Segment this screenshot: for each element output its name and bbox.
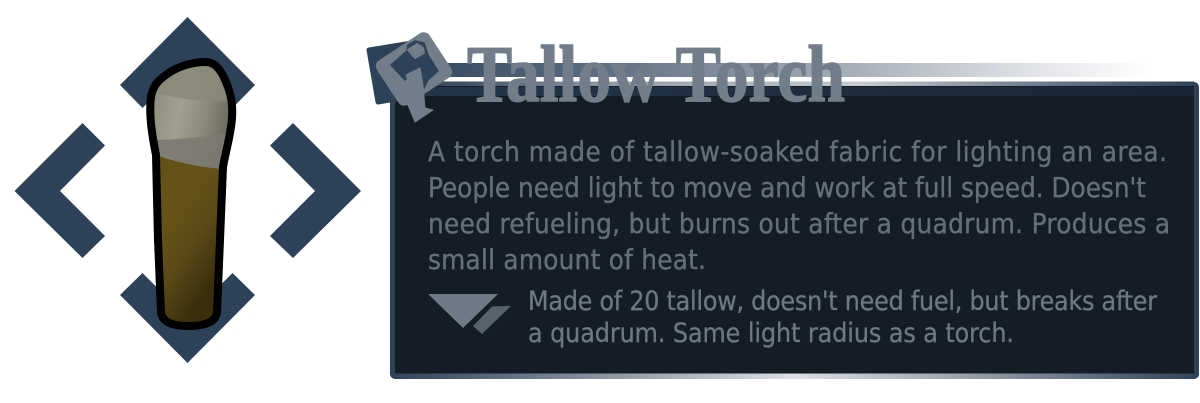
panel: description box	[390, 82, 1199, 379]
description text	[428, 136, 1170, 276]
icon: note triangle	[428, 294, 511, 334]
description text: People need light to move and work at full speed. Doesn't	[428, 172, 1146, 204]
description text: small amount of heat.	[428, 244, 706, 276]
left icon: chevrons	[14, 17, 361, 363]
note text: a quadrum. Same light radius as a torch.	[528, 318, 1014, 349]
title: Tallow Torch	[467, 31, 845, 119]
description text: A torch made of tallow-soaked fabric for lighting an area.	[428, 136, 1167, 168]
icon: tallow torch	[145, 55, 240, 335]
title ribbon	[420, 63, 1160, 82]
icon: info badge	[369, 30, 455, 122]
note text	[528, 286, 1157, 349]
note text: Made of 20 tallow, doesn't need fuel, but breaks after	[528, 286, 1157, 317]
description text: need refueling, but burns out after a quadrum. Produces a	[428, 208, 1170, 240]
